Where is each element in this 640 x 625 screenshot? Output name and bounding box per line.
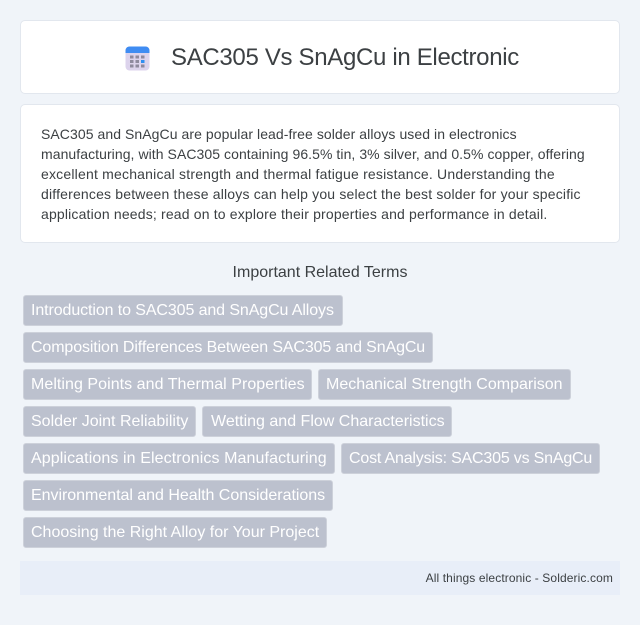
tag: environmental: Environmental and Health Considerations <box>31 487 325 504</box>
intro text panel <box>20 104 620 243</box>
tag: applications <box>23 443 335 474</box>
section heading: Important Related Terms <box>233 264 407 281</box>
tag: choosing alloy <box>23 517 327 548</box>
footer bar <box>20 561 620 595</box>
title: SAC305 Vs SnAgCu in Electronic <box>171 44 519 71</box>
tag: composition: Composition Differences Between SAC305 and SnAgCu <box>31 339 425 356</box>
intro paragraph: excellent mechanical strength and thermal fatigue resistance. Understanding the <box>41 166 555 182</box>
tag: cost analysis <box>341 443 600 474</box>
tag: reliability <box>23 406 196 437</box>
tag: wetting <box>202 406 452 437</box>
icon: calendar grid <box>126 46 150 70</box>
intro paragraph: manufacturing, with SAC305 containing 96.5% tin, 3% silver, and 0.5% copper, offering <box>41 146 585 162</box>
tag: reliability: Solder Joint Reliability <box>31 413 188 430</box>
footer text: All things electronic - Solderic.com <box>426 571 613 585</box>
tag: melting points <box>23 369 312 400</box>
tag: mechanical strength: Mechanical Strength Comparison <box>326 376 563 393</box>
tag: cost analysis: Cost Analysis: SAC305 vs SnAgCu <box>349 450 592 467</box>
intro paragraph: differences between these alloys can help you select the best solder for your specific <box>41 186 581 202</box>
tag: composition <box>23 332 433 363</box>
tag: melting points: Melting Points and Thermal Properties <box>31 376 305 393</box>
header panel <box>20 20 620 94</box>
intro paragraph: SAC305 and SnAgCu are popular lead-free solder alloys used in electronics <box>41 126 517 142</box>
tag: applications: Applications in Electronics Manufacturing <box>31 450 327 467</box>
tag: environmental <box>23 480 333 511</box>
related terms tags <box>23 295 600 548</box>
tag: mechanical strength <box>318 369 571 400</box>
intro paragraph <box>41 126 585 222</box>
tag: choosing alloy: Choosing the Right Alloy for Your Project <box>31 524 319 541</box>
tag: introduction <box>23 295 343 326</box>
tag: introduction: Introduction to SAC305 and SnAgCu Alloys <box>31 302 334 319</box>
tag: wetting: Wetting and Flow Characteristics <box>211 413 445 430</box>
intro paragraph: application needs; read on to explore their properties and performance in detail. <box>41 206 547 222</box>
